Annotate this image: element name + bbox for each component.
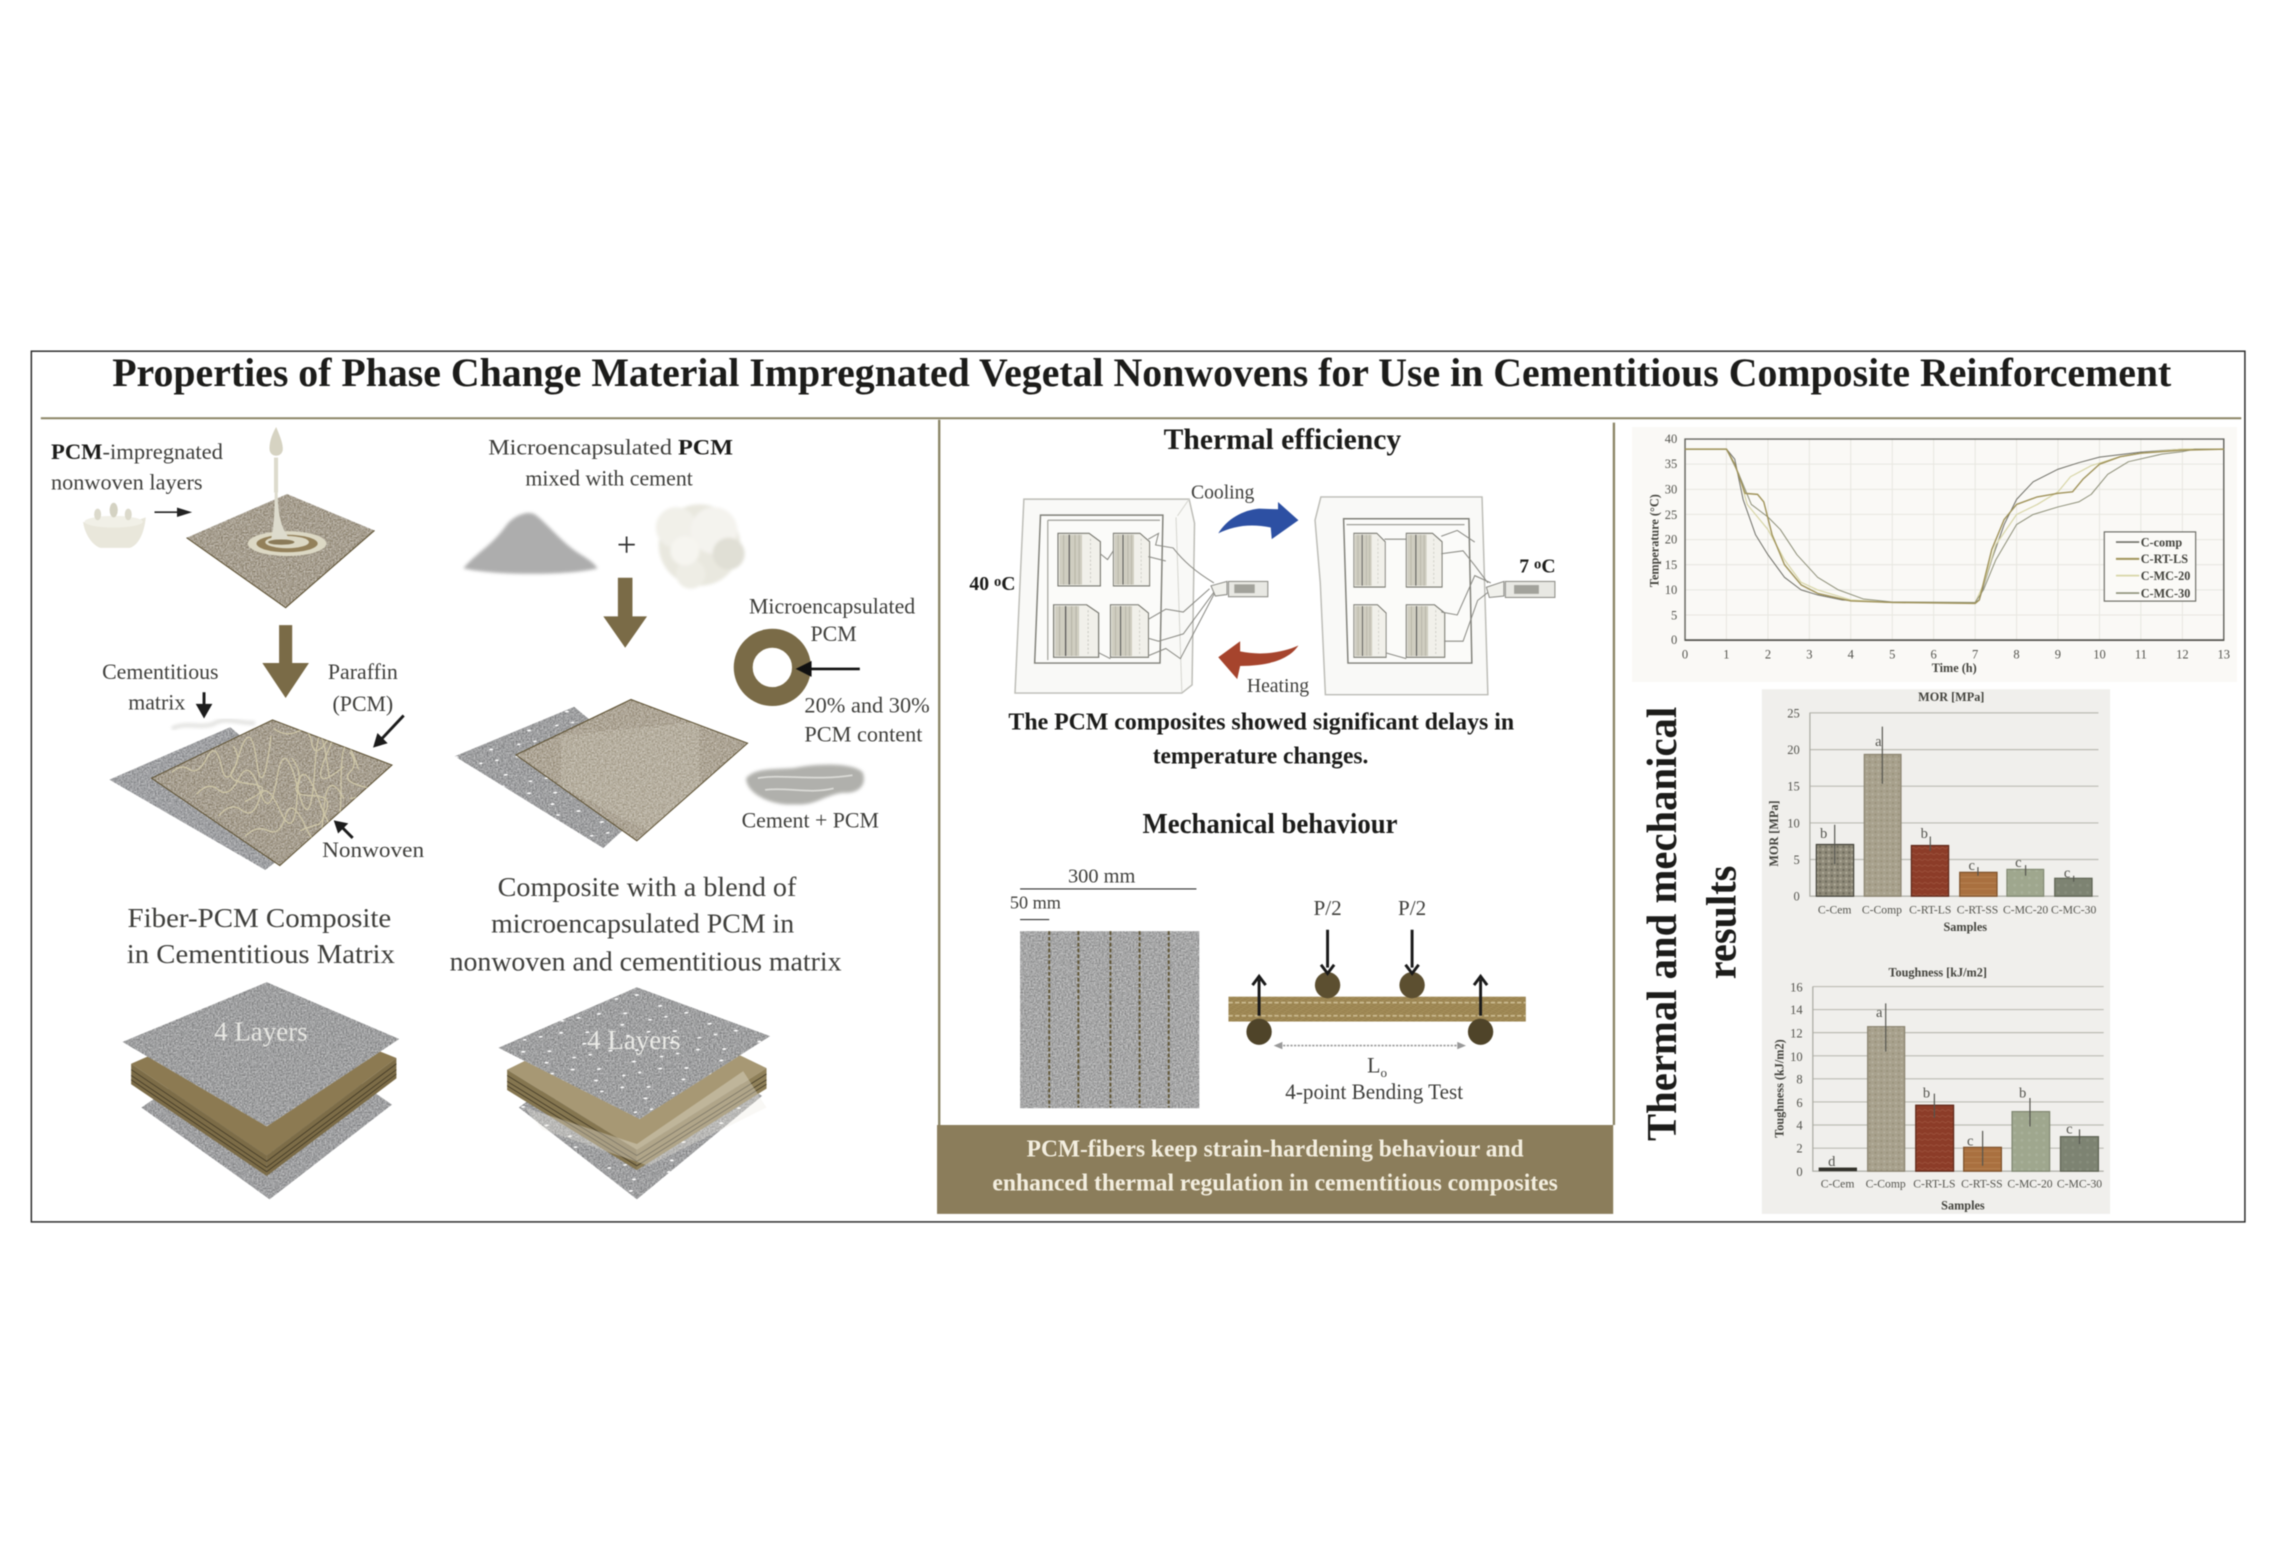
- heading: composite with blend: microencapsulated PCM in: [491, 909, 795, 939]
- heading: composite with blend: [450, 872, 842, 977]
- line chart: temperature vs time: 25: [1665, 508, 1677, 522]
- line chart: temperature vs time: 6: [1931, 648, 1937, 662]
- label: 40 C: 40: [969, 573, 989, 595]
- bar chart: toughness: C-MC-20: [2007, 1178, 2053, 1191]
- title: Properties of Phase Change Material Impregnated Vegetal Nonwovens for Use in Cementitious Composite Reinforcement: [112, 350, 2172, 395]
- bar chart panel background: [1762, 689, 2110, 1214]
- line chart: temperature vs time: 7: [1972, 648, 1978, 662]
- bar chart: MOR: Samples: [1944, 920, 1987, 934]
- label: cementitious matrix: Cementitious: [102, 660, 219, 684]
- bar chart: MOR: 25: [1787, 707, 1800, 721]
- label: 40 C: o: [994, 574, 1001, 590]
- label: nonwoven: Nonwoven: [322, 838, 424, 862]
- label: paraffin PCM: [328, 660, 404, 748]
- outer frame: [31, 351, 2245, 1222]
- line chart: temperature vs time: 0: [1671, 633, 1677, 647]
- bar chart: MOR: MOR [MPa]: [1767, 800, 1781, 867]
- line chart: temperature vs time: 1: [1723, 648, 1730, 662]
- panel: thermal and mechanical tests: [937, 420, 1614, 1214]
- icon: cement powder pile: [463, 513, 597, 574]
- banner: conclusion: PCM-fibers keep strain-hardening behaviour and: [1027, 1136, 1524, 1162]
- panel: thermal and mechanical results: [1632, 427, 2237, 1214]
- label: 7 C: o: [1534, 556, 1541, 572]
- banner: conclusion: [937, 1125, 1613, 1214]
- line chart: temperature vs time: 4: [1848, 648, 1855, 662]
- label: microencapsulated PCM mixed with cement: mixed with cement: [525, 466, 693, 490]
- icon: PCM microcapsule powder: [656, 504, 745, 589]
- line chart: temperature vs time: 12: [2176, 648, 2189, 662]
- label: 4 layers: 4 Layers: [587, 1025, 681, 1055]
- arrow: to nonwoven: [154, 509, 189, 516]
- label: microencapsulated PCM ring: Microencapsulated: [749, 595, 915, 619]
- label: 7 C: C: [1541, 556, 1556, 578]
- label: paraffin PCM: Paraffin: [328, 660, 398, 684]
- heading: thermal efficiency: Thermal efficiency: [1164, 423, 1401, 456]
- bar chart: MOR: c: [2064, 865, 2071, 881]
- bar chart: MOR: C-Cem: [1818, 904, 1852, 917]
- bar chart: MOR: C-MC-30: [2051, 904, 2096, 917]
- vertical heading: thermal and mechanical results: [1639, 707, 1746, 1141]
- label: PCM-impregnated nonwoven layers: PCM-impregnated: [51, 440, 223, 464]
- layered sheet: cement with microcapsules: [455, 699, 748, 848]
- bar chart: toughness: C-Comp: [1866, 1178, 1906, 1191]
- bar chart: toughness: 10: [1790, 1050, 1803, 1064]
- line chart: temperature vs time: Time (h): [1932, 661, 1977, 675]
- label: microencapsulated PCM mixed with cement: Microencapsulated PCM: [488, 436, 733, 460]
- bar chart: MOR: 20: [1787, 743, 1800, 757]
- arrow: heating: [1218, 641, 1298, 679]
- heading: composite with blend: Composite with a blend of: [498, 872, 796, 902]
- line chart: temperature vs time: Temperature (°C): [1647, 494, 1661, 587]
- diagram: 4-point bending test: P/2: [1313, 896, 1342, 920]
- bar chart: MOR: [1767, 690, 2098, 934]
- line chart: temperature vs time: 35: [1665, 457, 1677, 471]
- heading: fiber-PCM composite: Fiber-PCM Composite: [128, 903, 391, 933]
- bar chart: MOR: 10: [1787, 817, 1800, 831]
- bar chart: MOR: a: [1875, 734, 1882, 750]
- bar chart: toughness: C-RT-SS: [1961, 1178, 2003, 1191]
- bar chart: toughness: 14: [1790, 1003, 1803, 1017]
- composite specimen plate: [1020, 931, 1199, 1108]
- bar chart: toughness: 12: [1790, 1027, 1803, 1041]
- icon: PCM bowl: [83, 503, 146, 548]
- heading: composite with blend: nonwoven and cementitious matrix: [450, 947, 842, 977]
- dimensions: 300 mm and 50 mm: [1010, 865, 1196, 920]
- label: paraffin PCM: (PCM): [333, 692, 393, 716]
- label: microencapsulated PCM ring: [743, 595, 915, 697]
- bar chart: toughness: 8: [1796, 1072, 1803, 1086]
- arrow: process step 2: [603, 578, 647, 648]
- dimensions: 300 mm and 50 mm: 50 mm: [1010, 893, 1061, 913]
- arrow: cooling: [1218, 502, 1298, 539]
- bar chart: toughness: [1773, 965, 2104, 1213]
- line chart: temperature vs time: 5: [1671, 608, 1677, 622]
- heading: fiber-PCM composite: in Cementitious Matrix: [127, 939, 395, 969]
- bar chart: MOR: MOR [MPa]: [1918, 690, 1984, 704]
- bar chart: toughness: Toughness (kJ/m2): [1773, 1039, 1787, 1138]
- diagram: 4-point bending test: P/2: [1398, 896, 1426, 920]
- line chart: temperature vs time: 13: [2218, 648, 2230, 662]
- bar chart: MOR: C-RT-SS: [1957, 904, 1998, 917]
- vertical heading: thermal and mechanical results: Thermal and mechanical: [1639, 707, 1686, 1141]
- line chart: temperature vs time: 9: [2055, 648, 2061, 662]
- line chart: temperature vs time: 8: [2013, 648, 2020, 662]
- bar chart: toughness: C-Cem: [1821, 1178, 1854, 1191]
- line chart: temperature vs time: [1632, 427, 2237, 682]
- bar chart: MOR: C-Comp: [1862, 904, 1902, 917]
- bar chart: MOR: b: [1921, 826, 1928, 842]
- label: PCM content: PCM content: [804, 723, 922, 747]
- bar chart: toughness: 0: [1796, 1165, 1803, 1179]
- bar chart: MOR: C-MC-20: [2003, 904, 2048, 917]
- heading: fiber-PCM composite: [127, 903, 395, 969]
- text: thermal finding: [1008, 708, 1514, 770]
- label: PCM-impregnated nonwoven layers: [51, 440, 223, 495]
- plus sign: +: [617, 526, 637, 565]
- dimensions: 300 mm and 50 mm: 300 mm: [1068, 865, 1136, 887]
- icon: data logger: [1211, 581, 1268, 597]
- label: 7 C: 7: [1519, 556, 1529, 578]
- label: 4 layers: 4 Layers: [214, 1016, 308, 1046]
- line chart: temperature vs time: 11: [2135, 648, 2147, 662]
- legend: C-MC-30: [2141, 586, 2190, 600]
- panel: composite fabrication: [51, 427, 930, 1199]
- text: thermal finding: The PCM composites showed significant delays in: [1008, 708, 1514, 735]
- nonwoven layer with PCM drip: [187, 427, 375, 608]
- icon: data logger: [1486, 581, 1555, 597]
- bar chart: toughness: c: [2066, 1122, 2073, 1138]
- bar chart: toughness: Samples: [1941, 1199, 1985, 1213]
- line chart: temperature vs time: 3: [1806, 648, 1812, 662]
- label: cementitious matrix: matrix: [128, 691, 185, 715]
- bar chart: MOR: 5: [1793, 853, 1800, 867]
- bar chart: MOR: 15: [1787, 780, 1800, 794]
- line chart: temperature vs time: 20: [1665, 533, 1677, 547]
- bar chart: toughness: c: [1967, 1133, 1974, 1149]
- bar chart: MOR: C-RT-LS: [1909, 904, 1951, 917]
- bar chart: MOR: c: [1968, 858, 1975, 874]
- stack: blended four layers: [498, 987, 770, 1199]
- stack: fiber-PCM four layers: [122, 982, 399, 1199]
- diagram: climate chamber at 40 C: [1015, 499, 1268, 693]
- label: cementitious matrix: [102, 660, 219, 716]
- bar chart: MOR: b: [1820, 826, 1827, 842]
- diagram: 4-point bending test: 4-point Bending Test: [1285, 1080, 1463, 1104]
- line chart: temperature vs time: 15: [1665, 558, 1677, 572]
- line chart: temperature vs time: 5: [1889, 648, 1895, 662]
- bar chart: toughness: 6: [1796, 1096, 1803, 1110]
- arrow: process step 1: [262, 625, 309, 698]
- bar chart: toughness: 16: [1790, 981, 1803, 995]
- vertical heading: thermal and mechanical results: results: [1699, 866, 1746, 979]
- diagram: 4-point bending test: L: [1367, 1054, 1381, 1078]
- bar chart: MOR: 0: [1793, 890, 1800, 904]
- bar chart: toughness: Toughness [kJ/m2]: [1888, 965, 1987, 979]
- diagram: climate chamber at 7 C: [1315, 497, 1555, 695]
- label: microencapsulated PCM mixed with cement: [488, 436, 733, 490]
- layered sheet: cement matrix and nonwoven with paraffin: [109, 720, 392, 870]
- line chart: temperature vs time: 2: [1765, 648, 1771, 662]
- diagram: 4-point bending test: [1228, 896, 1526, 1104]
- bar chart: toughness: C-MC-30: [2057, 1178, 2102, 1191]
- bar chart: toughness: C-RT-LS: [1913, 1178, 1955, 1191]
- label: microencapsulated PCM ring: PCM: [810, 622, 857, 646]
- legend: C-comp: [2141, 535, 2182, 549]
- line chart: temperature vs time: 30: [1665, 482, 1677, 496]
- bar chart: toughness: b: [2019, 1085, 2026, 1101]
- legend: C-MC-20: [2141, 569, 2190, 583]
- bar chart: toughness: a: [1876, 1005, 1883, 1021]
- banner: conclusion: enhanced thermal regulation in cementitious composites: [992, 1171, 1558, 1197]
- line chart: temperature vs time: 10: [1665, 583, 1677, 597]
- bar chart: toughness: b: [1923, 1085, 1930, 1101]
- icon: cement plus PCM: [742, 765, 879, 833]
- bar chart: toughness: d: [1828, 1154, 1836, 1170]
- label: PCM content: [804, 694, 930, 747]
- line chart: temperature vs time: 40: [1665, 432, 1677, 446]
- heading: mechanical behaviour: Mechanical behaviour: [1143, 809, 1398, 840]
- bar chart: MOR: c: [2015, 855, 2022, 871]
- label: 40 C: C: [1001, 573, 1015, 595]
- bar chart: toughness: 2: [1796, 1142, 1803, 1156]
- diagram: 4-point bending test: o: [1381, 1065, 1388, 1080]
- bar chart: toughness: 4: [1796, 1118, 1803, 1132]
- legend: C-RT-LS: [2141, 552, 2188, 566]
- line chart: temperature vs time: 0: [1682, 648, 1688, 662]
- text: thermal finding: temperature changes.: [1153, 743, 1368, 770]
- icon: cement plus PCM: Cement + PCM: [742, 809, 879, 833]
- label: PCM-impregnated nonwoven layers: nonwoven layers: [51, 471, 203, 495]
- legend: [2104, 532, 2196, 601]
- label: heating: Heating: [1247, 675, 1309, 697]
- label: PCM content: 20% and 30%: [804, 694, 930, 718]
- label: cooling: Cooling: [1191, 481, 1254, 503]
- line chart: temperature vs time: 10: [2093, 648, 2106, 662]
- label: nonwoven: [322, 820, 424, 862]
